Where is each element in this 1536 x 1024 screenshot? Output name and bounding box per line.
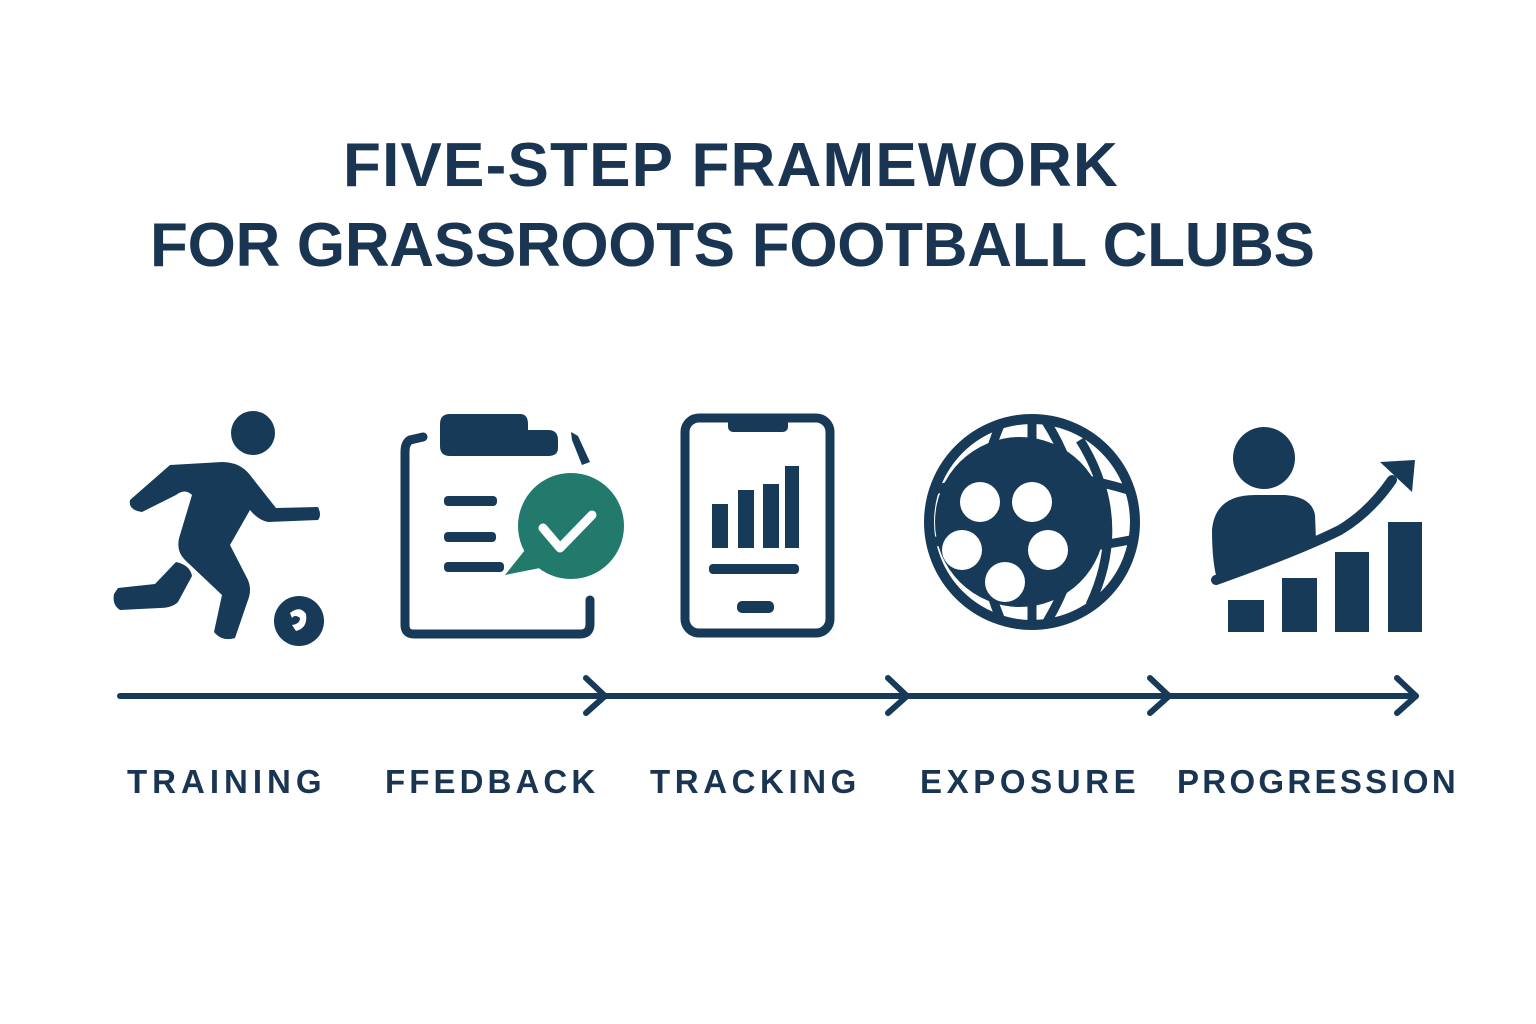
title [150, 131, 1315, 280]
label: exposure: EXPOSURE [920, 763, 1140, 800]
label: training: TRAINING [127, 763, 326, 800]
icon: clipboard feedback [405, 414, 624, 634]
icon: footballer [114, 411, 324, 646]
icon: progression [1212, 427, 1422, 632]
title line 1: FIVE-STEP FRAMEWORK [343, 131, 1119, 200]
icon: globe football [929, 419, 1135, 625]
label: feedback: FFEDBACK [385, 763, 599, 800]
icon: phone tracking [685, 418, 830, 633]
arrow: timeline [120, 678, 1416, 713]
label: progression: PROGRESSION [1177, 763, 1459, 800]
label: tracking: TRACKING [650, 763, 861, 800]
title line 2: FOR GRASSROOTS FOOTBALL CLUBS [150, 211, 1315, 280]
